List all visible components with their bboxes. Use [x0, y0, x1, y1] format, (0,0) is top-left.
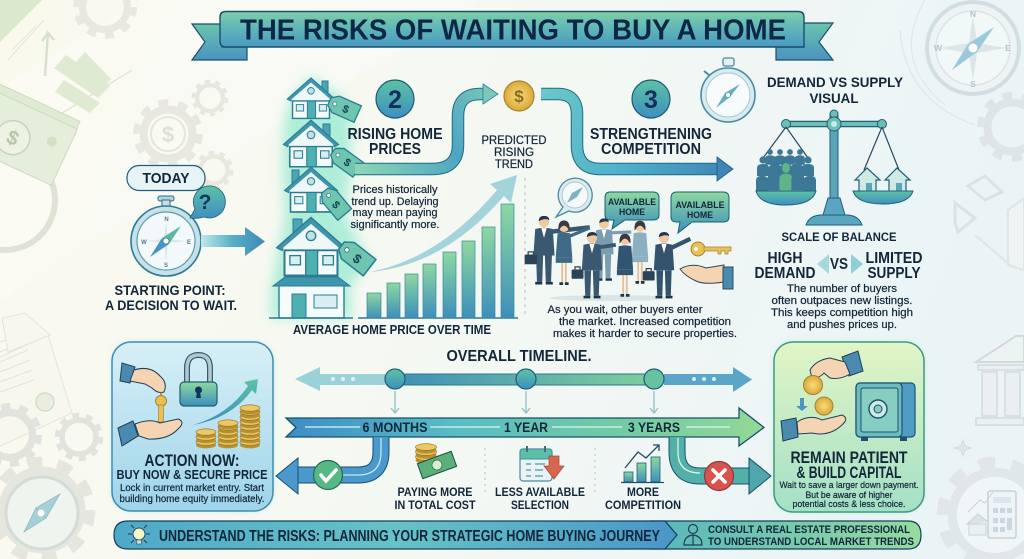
- main timeline arrow: 1 YEAR: [504, 420, 548, 435]
- panel: remain patient: [774, 342, 924, 512]
- consequence: more competition: [605, 445, 681, 512]
- icon: house 1: [287, 78, 335, 118]
- icon: stopwatch: [701, 58, 755, 122]
- dots: [694, 377, 714, 381]
- rising prices text: Prices historically: [352, 184, 438, 196]
- chart caption: AVERAGE HOME PRICE OVER TIME: [293, 322, 491, 337]
- down arrows: [391, 391, 658, 413]
- icon: tag 4: $: [350, 250, 365, 267]
- high demand vs limited supply: DEMAND: [754, 265, 816, 282]
- icon: safe: [856, 383, 915, 441]
- overall timeline track: [295, 367, 752, 413]
- high demand vs limited supply: HIGH: [768, 250, 802, 267]
- action text: [120, 483, 264, 505]
- heading: rising home prices: PRICES: [369, 141, 421, 158]
- icon: giving hand: [810, 351, 863, 378]
- icon: growth chart: [621, 445, 664, 482]
- divider: [594, 448, 596, 494]
- demand text: often outpaces new listings.: [772, 295, 912, 307]
- competition text: the market. Increased competition: [559, 316, 731, 328]
- high demand vs limited supply: LIMITED: [866, 250, 922, 267]
- consequence: paying more: IN TOTAL COST: [394, 498, 476, 512]
- heading: demand vs supply: [767, 74, 904, 106]
- icon: gold coin: $: [514, 87, 524, 106]
- icon: open hand: [118, 419, 182, 446]
- footer consult text: [708, 524, 914, 548]
- overall timeline heading: OVERALL TIMELINE.: [446, 348, 592, 365]
- action text: Lock in current market entry. Start: [120, 483, 264, 494]
- background decoration: right compass, gears, map, bank and calculator: E: [1005, 43, 1011, 53]
- divider: [524, 178, 526, 316]
- today tag: TODAY: [142, 170, 190, 187]
- badge 2: [376, 80, 414, 118]
- badge 3: [632, 80, 670, 118]
- consequence: more competition: MORE: [627, 485, 659, 499]
- icon: house 4: [269, 217, 353, 318]
- consequence: less selection: [495, 446, 585, 512]
- high demand vs limited supply: VS: [830, 256, 848, 273]
- background decoration: left gears, chart, money and clock: [0, 0, 232, 250]
- left ribbon tail: [192, 24, 247, 60]
- scale caption: SCALE OF BALANCE: [782, 230, 896, 244]
- demand text: The number of buyers: [787, 283, 897, 295]
- remain text: But be aware of higher: [806, 490, 892, 501]
- icon: red x: [704, 462, 734, 490]
- icon: house 3: [284, 167, 338, 212]
- rising prices text: significantly more.: [350, 219, 440, 231]
- icon: light bulb: [128, 525, 150, 544]
- background decoration: right compass, gears, map, bank and calculator: [900, 0, 1024, 559]
- icon: house 2: [283, 120, 339, 167]
- callout: available home 1: [605, 192, 659, 229]
- remain text: [780, 480, 918, 510]
- predicted trend label: [482, 135, 546, 171]
- remain heading: & BUILD CAPITAL: [796, 464, 902, 482]
- starting point caption: STARTING POINT:: [114, 283, 226, 298]
- curved arrow to competition: [541, 94, 733, 181]
- competition text: As you wait, other buyers enter: [548, 304, 703, 316]
- high demand vs limited supply: [754, 250, 922, 282]
- demand text: This keeps competition high: [771, 307, 913, 319]
- buyer right man: [643, 232, 690, 298]
- buyer center man: [572, 232, 616, 298]
- bar chart: average home price: [358, 204, 518, 318]
- high demand vs limited supply: SUPPLY: [868, 265, 921, 282]
- predicted trend label: TREND: [495, 159, 533, 171]
- callout: available home 2: AVAILABLE: [676, 200, 724, 211]
- footer left section: [114, 521, 677, 549]
- growth arrow: [193, 379, 258, 425]
- icon: tag 2: $: [341, 156, 353, 170]
- heading: strengthening competition: COMPETITION: [601, 141, 701, 158]
- icon: coin stacks: [196, 405, 260, 448]
- heading: strengthening competition: STRENGTHENING: [590, 126, 712, 143]
- icon: stopwatch compass: S: [164, 263, 168, 269]
- heading: demand vs supply: VISUAL: [810, 90, 859, 106]
- icon: tag 4: [335, 238, 376, 276]
- title text: THE RISKS OF WAITING TO BUY A HOME: [240, 14, 786, 46]
- action text: building home equity immediately.: [120, 494, 264, 505]
- icon: second coin: [815, 397, 833, 415]
- callout: available home 2: [671, 192, 729, 233]
- demand text: and pushes prices up.: [787, 319, 897, 331]
- remain text: potential costs & less choice.: [792, 499, 906, 510]
- small houses: [855, 168, 910, 192]
- starting point caption: [105, 283, 237, 313]
- icon: tag 3: [318, 185, 352, 220]
- icon: stopwatch compass: N: [164, 217, 169, 223]
- competing buyers group: [525, 216, 690, 301]
- icon: receiving hand: [781, 415, 846, 441]
- milestone dots: [385, 369, 664, 389]
- banner body: [220, 12, 804, 47]
- icon: question bubble: ?: [199, 191, 211, 214]
- action heading: BUY NOW & SECURE PRICE: [116, 467, 268, 482]
- rising prices text: may mean paying: [352, 207, 438, 219]
- action heading: [116, 452, 268, 482]
- rising prices text: trend up. Delaying: [352, 196, 438, 208]
- icon: calendar: [520, 446, 564, 481]
- consequence: more competition: COMPETITION: [605, 498, 681, 512]
- rising prices text: [350, 184, 440, 231]
- predicted trend label: PREDICTED: [482, 135, 546, 147]
- icon: stacked houses with price tags: [269, 78, 376, 318]
- remain heading: [790, 449, 908, 482]
- background decoration: bottom-left paper, gears and compass: [0, 313, 101, 558]
- branch arrow: buy now: [276, 437, 381, 494]
- icon: question bubble: [190, 186, 225, 218]
- callout: available home 1: HOME: [619, 207, 645, 218]
- title banner: [192, 12, 833, 60]
- buyer back right: [632, 221, 648, 284]
- competition text: makes it harder to secure properties.: [553, 328, 737, 340]
- remain text: Wait to save a larger down payment.: [780, 480, 918, 491]
- icon: green check: [314, 460, 342, 490]
- dots: [333, 377, 353, 381]
- pan strings: [763, 127, 899, 170]
- panel: action now: [112, 342, 273, 511]
- buyer center woman: [617, 234, 633, 297]
- buyer back left: [594, 218, 631, 281]
- scale of balance illustration: [756, 110, 913, 225]
- icon: key: [691, 242, 731, 256]
- heading: rising home prices: RISING HOME: [348, 126, 442, 143]
- main timeline arrow: 3 YEARS: [628, 420, 680, 435]
- competition text: [548, 304, 737, 340]
- background decoration: right compass, gears, map, bank and calculator: N: [970, 9, 976, 19]
- background decoration: left gears, chart, money and clock: $: [3, 126, 22, 151]
- icon: open hand: [680, 265, 733, 289]
- starting point caption: A DECISION TO WAIT.: [105, 298, 237, 313]
- heading: rising home prices: [348, 126, 442, 158]
- consequence: less selection: SELECTION: [511, 498, 569, 512]
- trend arrow: [370, 175, 517, 272]
- icon: down arrow: [796, 398, 808, 411]
- divider: [484, 448, 486, 494]
- scale base and beam: [782, 110, 886, 225]
- main timeline arrow: 6 MONTHS: [362, 420, 428, 435]
- badge 3: 3: [644, 86, 658, 114]
- branch arrow: wait: [677, 437, 771, 494]
- footer right section: [650, 521, 921, 549]
- icon: money and coins: [416, 444, 457, 479]
- footer headline: UNDERSTAND THE RISKS: PLANNING YOUR STRATEGIC HOME BUYING JOURNEY: [159, 528, 661, 545]
- main timeline arrow: [286, 408, 764, 446]
- consequence: paying more: PAYING MORE: [398, 485, 472, 499]
- icon: tag 3: $: [329, 199, 342, 211]
- buyer left woman: [556, 221, 590, 285]
- icon: compass speech bubble: [556, 178, 592, 217]
- consequence: paying more: [394, 444, 476, 512]
- footer consult text: CONSULT A REAL ESTATE PROFESSIONAL: [708, 524, 910, 536]
- right ribbon tail: [776, 23, 833, 60]
- remain heading: REMAIN PATIENT: [790, 449, 908, 467]
- crowd of buyers: [756, 149, 816, 191]
- background decoration: right compass, gears, map, bank and calculator: W: [934, 43, 943, 53]
- icon: tag 2: [328, 144, 363, 177]
- demand text: [771, 283, 913, 331]
- callout: available home 1: AVAILABLE: [608, 197, 656, 208]
- arrow from today: [201, 227, 265, 256]
- icon: tag 1: $: [340, 103, 351, 116]
- badge 2: 2: [388, 86, 402, 114]
- callout: available home 2: HOME: [687, 210, 713, 221]
- background decoration: right compass, gears, map, bank and calculator: S: [970, 79, 976, 89]
- icon: padlock: [180, 355, 217, 406]
- faded past arrow: [295, 367, 385, 391]
- consequence: less selection: LESS AVAILABLE: [495, 485, 585, 499]
- icon: stopwatch compass: W: [141, 240, 147, 246]
- icon: stopwatch compass: [131, 196, 201, 276]
- predicted trend label: RISING: [494, 147, 534, 159]
- left pan: [756, 191, 816, 205]
- icon: gold coin: [504, 81, 534, 111]
- icon: consultant: [684, 524, 702, 545]
- heading: demand vs supply: DEMAND VS SUPPLY: [767, 74, 904, 90]
- house stack glow: [270, 76, 370, 318]
- footer bar: [114, 521, 921, 549]
- right pan: [853, 191, 913, 204]
- icon: stopwatch compass: E: [187, 240, 191, 246]
- heading: strengthening competition: [590, 126, 712, 158]
- curved arrow to coin: [355, 84, 498, 169]
- icon: hand with key: [120, 363, 166, 422]
- future arrow: [664, 367, 752, 392]
- action heading: ACTION NOW:: [144, 452, 240, 470]
- icon: tag 1: [326, 93, 361, 122]
- background decoration: left gears, chart, money and clock: $: [162, 122, 174, 147]
- icon: coin falling: [804, 376, 822, 394]
- buyer left man: [525, 216, 590, 284]
- footer consult text: TO UNDERSTAND LOCAL MARKET TRENDS: [708, 536, 914, 548]
- today tag: [127, 166, 205, 190]
